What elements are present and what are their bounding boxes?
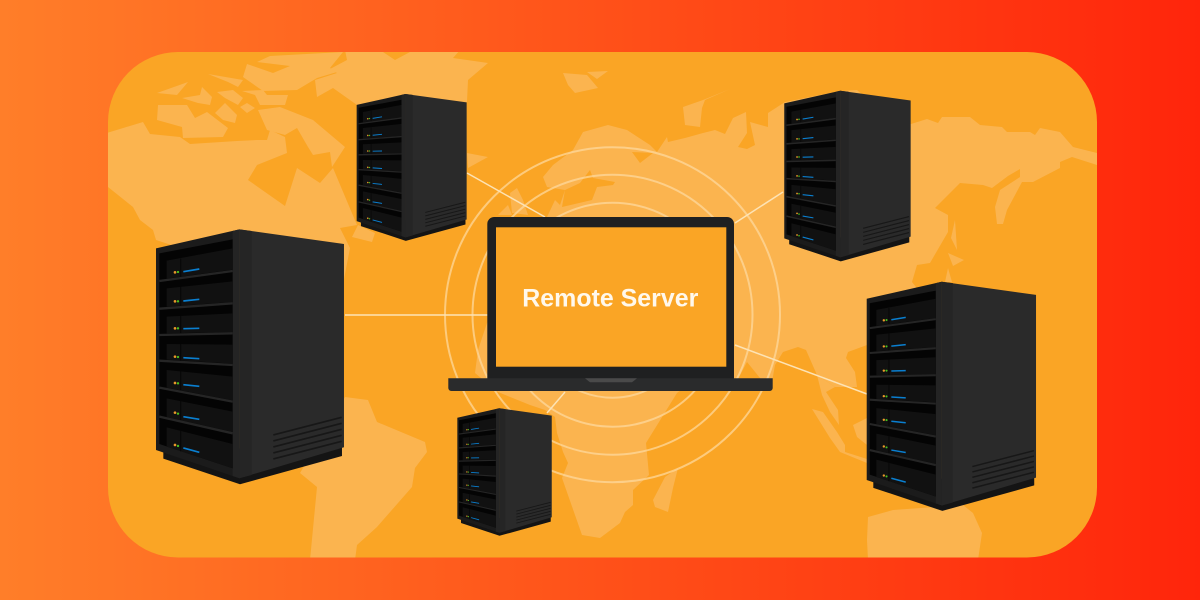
laptop notch <box>585 378 637 382</box>
map: Australia <box>867 505 982 560</box>
laptop lid <box>487 217 734 380</box>
map: North America <box>108 122 357 278</box>
server: top right <box>784 91 911 261</box>
laptop base <box>448 378 773 391</box>
world map <box>100 50 1097 560</box>
map: Sumatra and Java <box>812 409 867 463</box>
map: White Sea <box>632 152 653 163</box>
screen label: Remote Server <box>522 285 699 313</box>
map: Greenland <box>315 52 488 105</box>
laptop <box>448 217 773 391</box>
server: large left <box>156 229 344 484</box>
map: Quebec landmass <box>258 107 345 167</box>
map: British Isles <box>498 188 528 215</box>
server: top left <box>357 94 467 241</box>
map: Baltic Sea <box>562 170 615 207</box>
map: small island <box>467 153 488 168</box>
signal rings <box>445 147 780 482</box>
map: Japan <box>945 220 964 282</box>
server: bottom centre <box>457 408 552 536</box>
laptop screen <box>496 227 726 367</box>
map: Arctic islands <box>157 52 375 242</box>
map: Iceland <box>563 71 608 93</box>
orange rounded panel <box>108 52 1097 558</box>
map: Malay peninsula <box>817 375 839 425</box>
connection lines <box>345 173 867 413</box>
map: Svalbard <box>683 90 726 127</box>
server: large right <box>867 282 1036 511</box>
map: South America <box>300 397 427 560</box>
map: Eurasia and Africa <box>475 90 1097 538</box>
map: Borneo <box>853 418 867 445</box>
map: Madagascar <box>653 468 678 512</box>
